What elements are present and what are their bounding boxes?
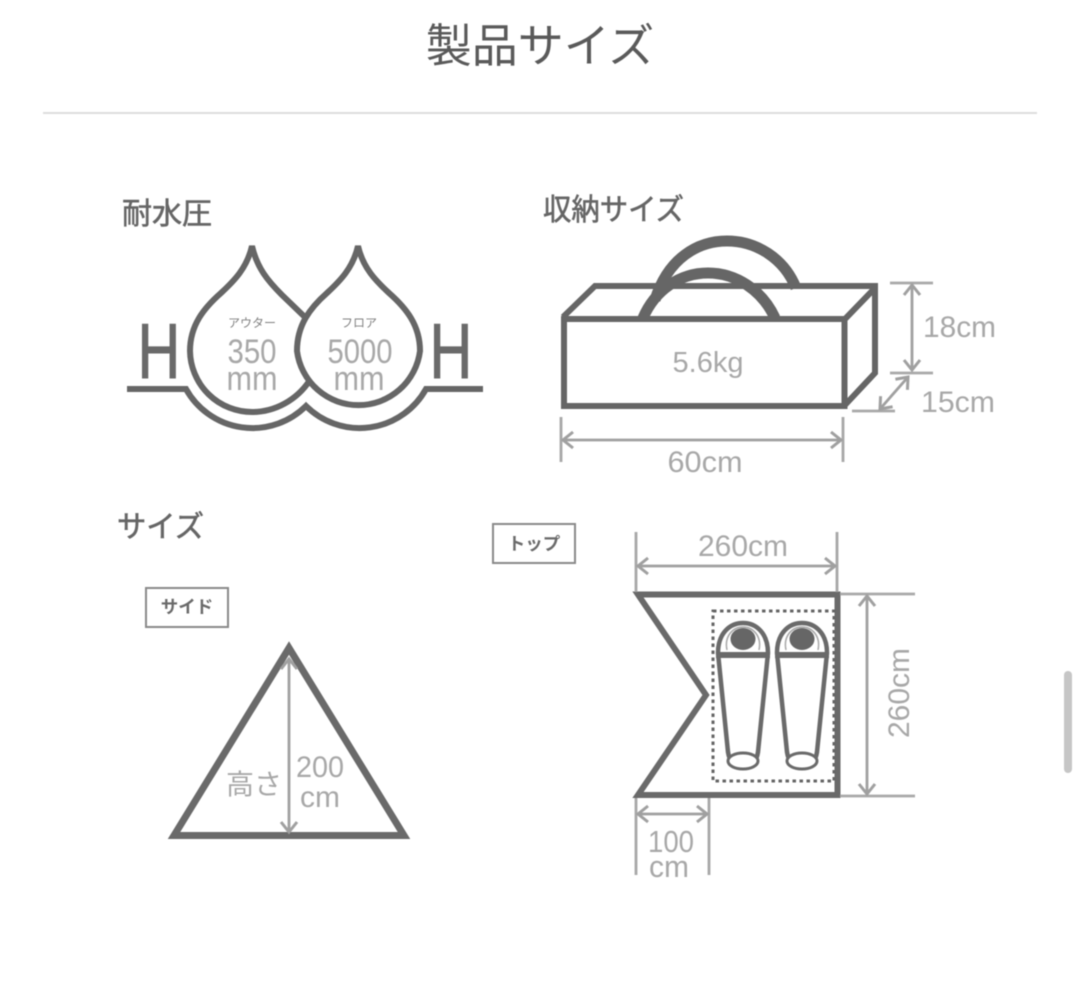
outer unit: mm (226, 360, 278, 398)
dimension: vestibule 100cm: 100 (648, 824, 694, 859)
bag back handle (655, 241, 796, 300)
top label box: トップ (508, 534, 561, 554)
top view tent outline (638, 594, 838, 795)
side label box (146, 588, 228, 627)
icon: right water drop (297, 246, 420, 405)
dimension: vestibule 100cm (636, 798, 709, 884)
height arrow (288, 659, 290, 832)
outer value: 350 (228, 333, 276, 371)
sleeping bag left (716, 623, 770, 769)
icon: left water drop (190, 246, 310, 412)
floor unit: mm (334, 360, 384, 398)
panel: water pressure (122, 198, 483, 428)
side view tent triangle (174, 648, 404, 836)
panel: storage size (543, 194, 996, 479)
floor value: 5000 (328, 333, 392, 371)
heading: water pressure: 耐水圧 (122, 198, 212, 231)
dimension: top depth 260cm: 260cm (883, 648, 916, 738)
side label box: サイド (161, 597, 213, 617)
bag body (563, 286, 875, 405)
dimension: width 60cm: 60cm (668, 446, 742, 479)
panel: size (117, 511, 916, 884)
heading: size: サイズ (117, 511, 204, 544)
floor label: フロア (341, 316, 377, 330)
title: 製品サイズ (426, 20, 654, 72)
icon: left H mark: H (138, 307, 180, 395)
sleeping bag right (775, 623, 829, 769)
scrollbar (1064, 671, 1072, 773)
bag front handle (643, 273, 775, 318)
dimension: height 18cm (890, 283, 996, 373)
dimension: height 18cm: 18cm (923, 311, 996, 344)
icon: right H mark: H (430, 307, 472, 395)
bag weight: 5.6kg (673, 347, 743, 379)
height unit: cm (300, 781, 340, 814)
inner tent dotted outline (713, 611, 834, 781)
water surface line (127, 389, 483, 428)
heading: storage size: 収納サイズ (543, 194, 684, 227)
dimension: vestibule 100cm: cm (649, 849, 689, 884)
dimension: depth 15cm (852, 377, 995, 419)
top label box (493, 524, 575, 563)
dimension: top width 260cm: 260cm (698, 530, 788, 563)
outer label: アウター (228, 316, 276, 330)
height label: 高さ (226, 769, 282, 800)
height value: 200 (296, 751, 344, 784)
dimension: depth 15cm: 15cm (921, 386, 995, 419)
